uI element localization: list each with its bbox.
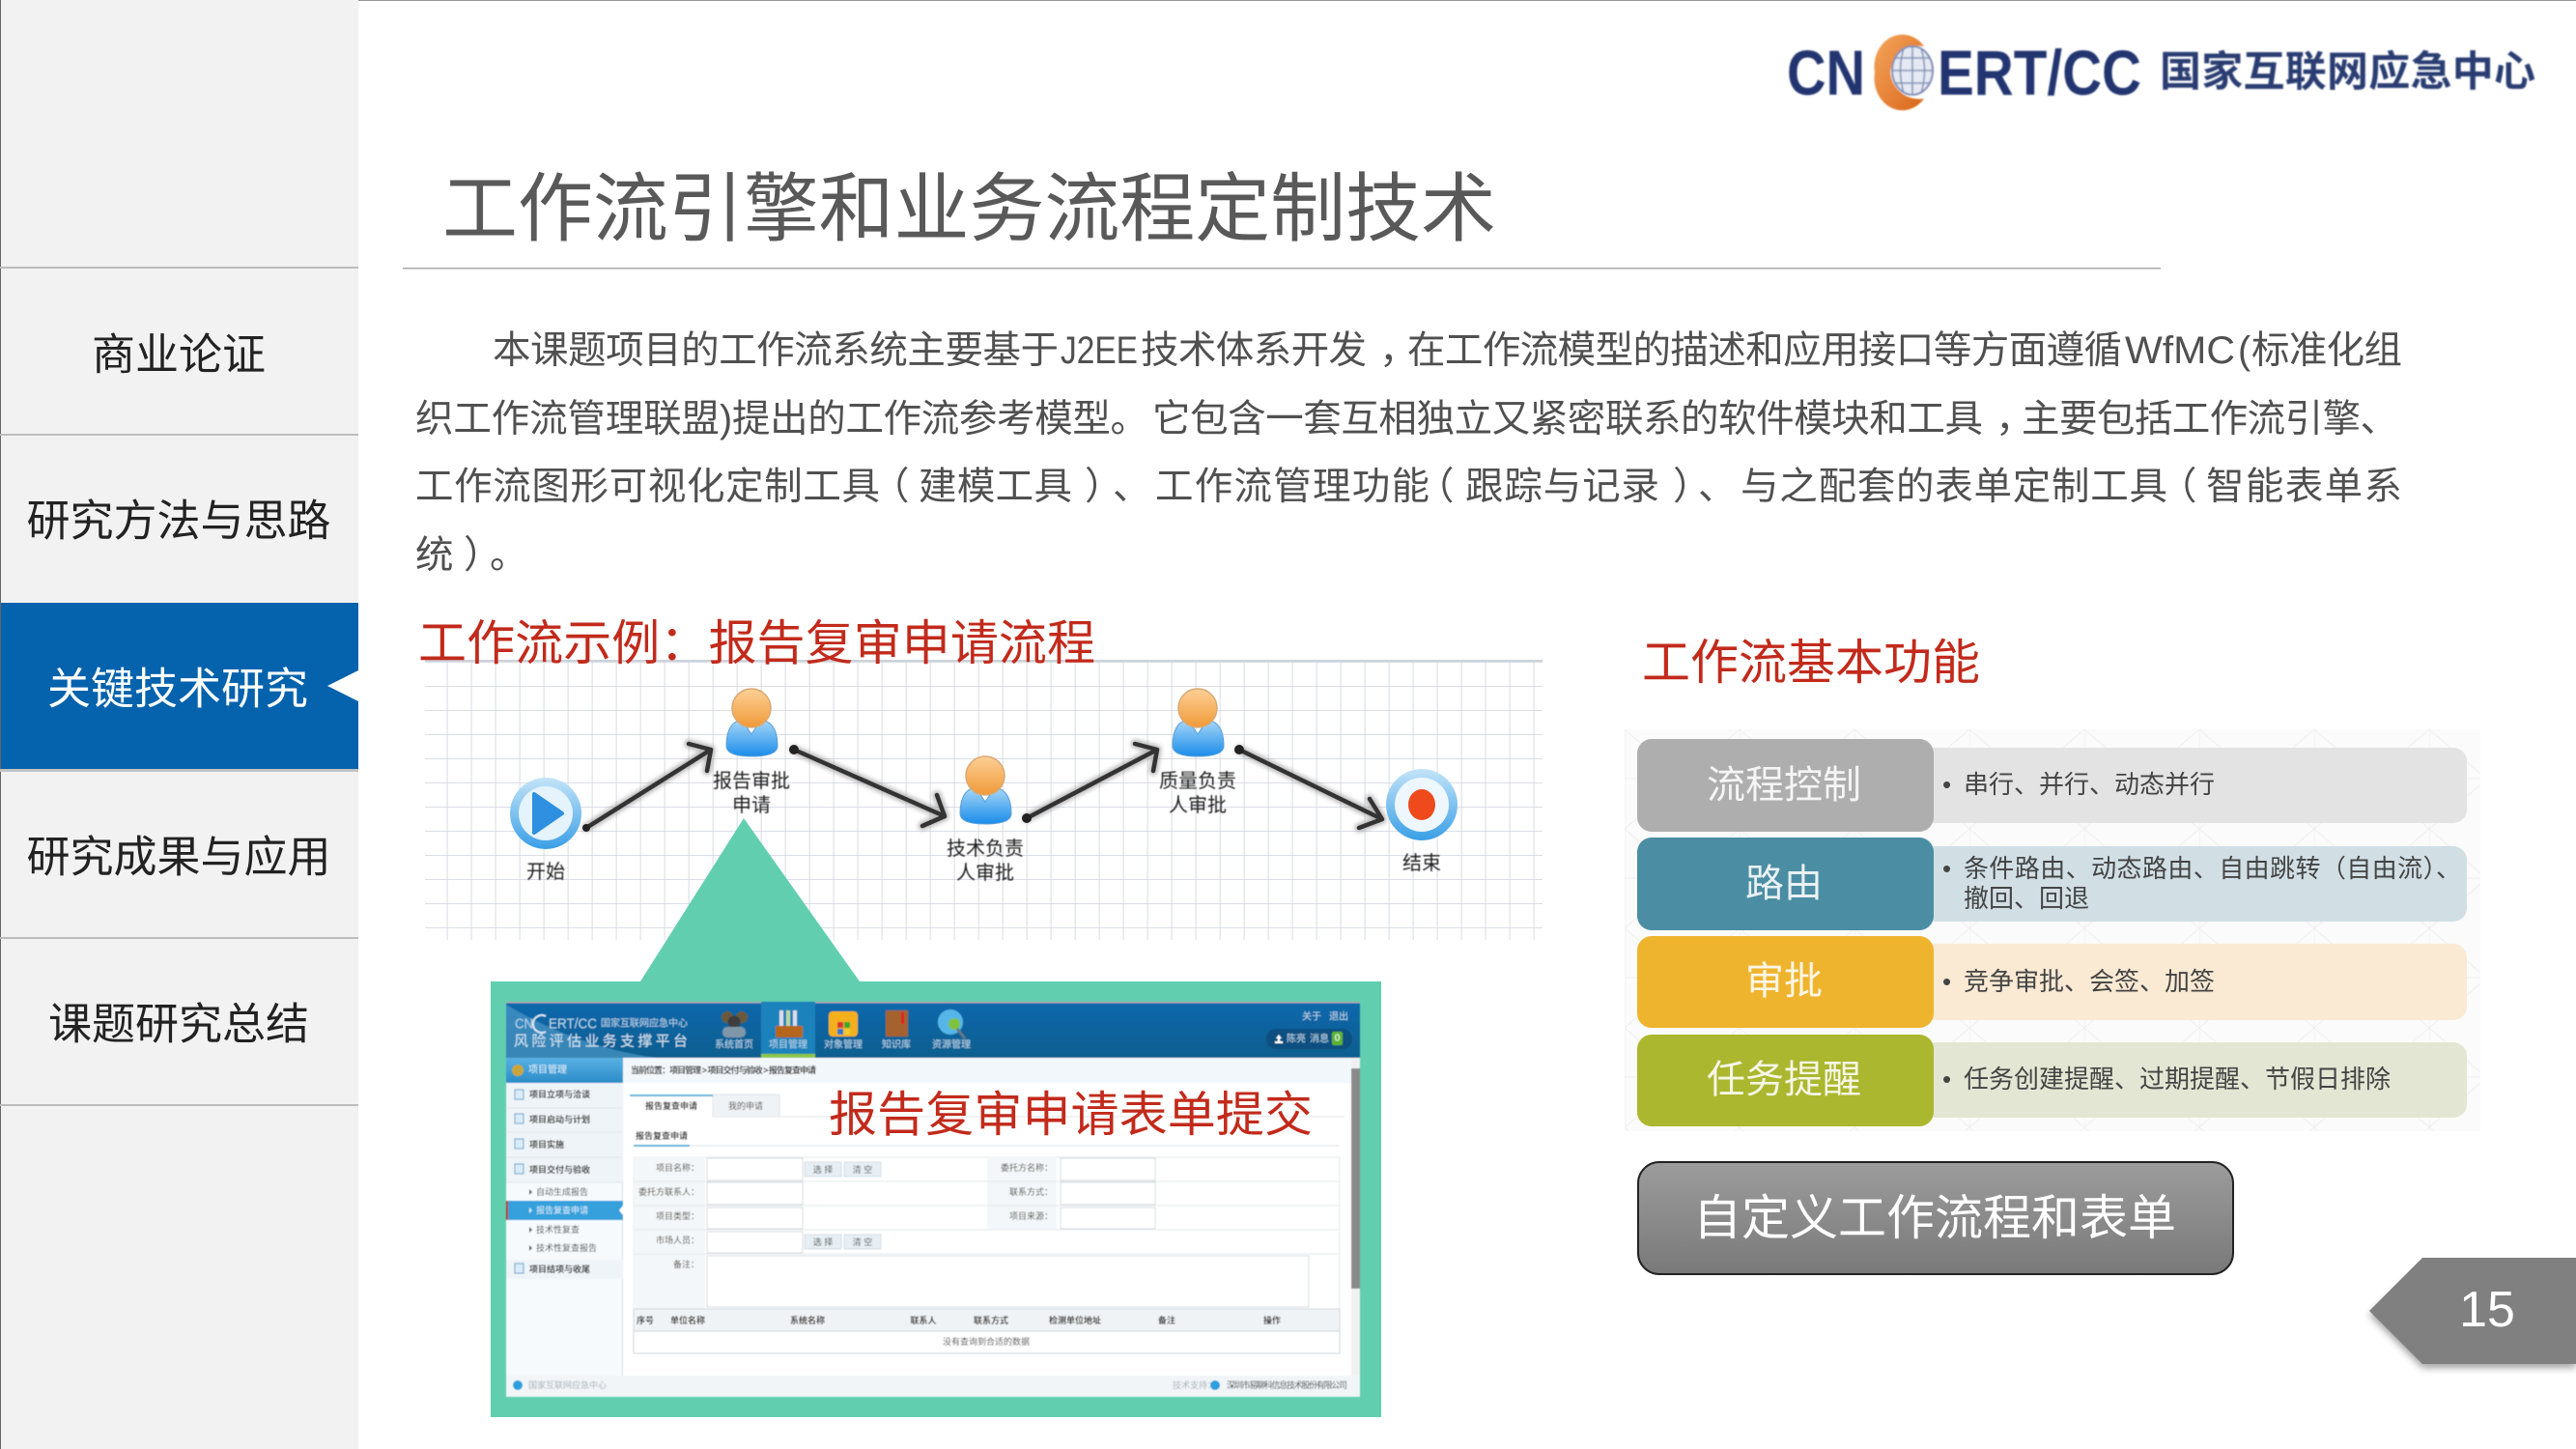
screenshot form: 清 空 — [853, 1164, 872, 1175]
nav item: business case: 商业论证 — [92, 330, 266, 379]
text block: introduction paragraph: 提出的工作流参考模型。 — [732, 398, 1148, 440]
heading: workflow example: 工作流示例：报告复审申请流程 — [418, 616, 1095, 670]
icon: start node — [510, 778, 581, 849]
icon: nav knowledge book — [886, 1010, 908, 1037]
text block: introduction paragraph: 、 — [1113, 466, 1151, 508]
label: quality lead approval: 人审批 — [1169, 794, 1227, 816]
icon: globe — [1874, 35, 1933, 110]
screenshot header bar: ERT/CC — [549, 1016, 597, 1032]
screenshot header bar: CN — [515, 1016, 533, 1032]
screenshot form: 市场人员： — [656, 1235, 699, 1245]
row: approval: • — [1942, 967, 1951, 996]
row: task reminder: 任务提醒 — [1707, 1059, 1861, 1101]
row: process control — [1637, 739, 2467, 832]
icon: nav object — [829, 1011, 858, 1037]
logo: CNCERT/CC: 国家互联网应急中心 — [2160, 49, 2535, 96]
nav item: key technology (active) — [1, 603, 358, 769]
text block: introduction paragraph: 与之配套的表单定制工具 — [1741, 466, 2167, 508]
callout: custom workflow button: 自定义工作流程和表单 — [1693, 1191, 2176, 1245]
text block: introduction paragraph: ， — [1379, 329, 1418, 372]
screenshot header bar: 风险评估业务支撑平台 — [514, 1034, 688, 1049]
screenshot form: 委托方联系人： — [638, 1186, 699, 1197]
text block: introduction paragraph: ） — [1673, 466, 1712, 508]
icon: person technical lead — [960, 756, 1011, 824]
callout: custom workflow button — [1638, 1162, 2233, 1274]
screenshot table: 检测单位地址 — [1049, 1315, 1101, 1325]
screenshot form: 项目类型： — [656, 1210, 699, 1221]
heading: basic workflow functions: 工作流基本功能 — [1642, 636, 1980, 690]
screenshot sidebar: 项目立项与洽谈 — [529, 1089, 590, 1099]
screenshot header bar: 系统首页 — [715, 1037, 753, 1051]
label: report approval request: 申请 — [732, 794, 771, 816]
text block: introduction paragraph: 本课题项目的工作流系统主要基于 — [493, 329, 1059, 372]
arrow: tech review to quality review — [1022, 744, 1157, 823]
screenshot table: 联系方式 — [974, 1315, 1008, 1325]
text block: introduction paragraph: WfMC — [2125, 329, 2235, 372]
screenshot sidebar: 技术性复查报告 — [536, 1242, 597, 1253]
screenshot sidebar: 自动生成报告 — [536, 1186, 588, 1197]
icon: end node — [1386, 769, 1458, 840]
text block: introduction paragraph: ） — [464, 534, 502, 577]
text block: introduction paragraph: 标准化组 — [2251, 329, 2402, 372]
page number tag — [2369, 1258, 2576, 1368]
panel: form screenshot — [506, 1002, 1360, 1397]
panel: workflow function list — [1625, 729, 2480, 1131]
screenshot tabs: 报告复查申请 — [645, 1100, 697, 1111]
text block: introduction paragraph: 统 — [415, 534, 454, 577]
row: process control: 串行、并行、动态并行 — [1964, 770, 2215, 799]
screenshot tabs — [630, 1094, 1345, 1147]
row: routing: 撤回、回退 — [1964, 884, 2089, 913]
label: end: 结束 — [1402, 852, 1441, 874]
screenshot scrollbar — [1351, 1058, 1360, 1376]
text block: introduction paragraph: 跟踪与记录 — [1465, 466, 1659, 508]
screenshot form: 备注： — [673, 1259, 699, 1269]
text block: introduction paragraph: 在工作流模型的描述和应用接口等方面遵循 — [1407, 329, 2122, 372]
arrow: quality review to end — [1234, 745, 1382, 828]
screenshot form: 项目来源： — [1009, 1211, 1053, 1221]
row: task reminder: 任务创建提醒、过期提醒、节假日排除 — [1964, 1065, 2391, 1094]
text block: introduction paragraph: J2EE — [1061, 329, 1138, 372]
screenshot header bar: 资源管理 — [932, 1037, 971, 1051]
nav item: summary: 课题研究总结 — [48, 999, 309, 1049]
label: report approval request: 报告审批 — [713, 770, 790, 792]
screenshot sidebar: 项目交付与验收 — [529, 1164, 590, 1175]
screenshot sidebar: 项目管理 — [528, 1063, 567, 1076]
row: process control: • — [1942, 770, 1951, 799]
label: quality lead approval — [1159, 770, 1236, 816]
row: task reminder — [1637, 1035, 2467, 1126]
screenshot table — [634, 1309, 1340, 1353]
screenshot form: 项目名称： — [656, 1162, 699, 1173]
screenshot table: 单位名称 — [670, 1315, 705, 1325]
screenshot header bar: 知识库 — [882, 1037, 911, 1051]
text block: introduction paragraph: 工作流图形可视化定制工具 — [415, 466, 880, 508]
text block: introduction paragraph: ( — [2238, 329, 2250, 372]
arrow: start to report — [582, 744, 711, 832]
nav item: results and application: 研究成果与应用 — [26, 833, 331, 881]
text block: introduction paragraph: 织工作流管理联盟 — [415, 398, 720, 440]
label: quality lead approval: 质量负责 — [1159, 770, 1236, 792]
arrow: report to tech review — [789, 745, 945, 826]
text block: introduction paragraph: ） — [1085, 466, 1122, 508]
screenshot header bar: 消息 — [1310, 1032, 1329, 1045]
screenshot tabs: 我的申请 — [728, 1100, 763, 1111]
screenshot form: 选 择 — [813, 1236, 833, 1247]
nav item: research method: 研究方法与思路 — [26, 497, 331, 545]
row: approval — [1637, 936, 2467, 1028]
label: technical lead approval: 人审批 — [956, 862, 1014, 884]
screenshot form: 委托方名称： — [1001, 1162, 1053, 1173]
panel: left navigation sidebar — [0, 0, 358, 1449]
row: routing: • — [1942, 854, 1951, 883]
text block: introduction paragraph: 。 — [490, 534, 527, 577]
screenshot table: 没有查询到合适的数据 — [943, 1336, 1030, 1347]
icon: person quality lead — [1173, 689, 1224, 756]
callout: green pointer and screenshot frame — [491, 818, 1381, 1417]
screenshot breadcrumb — [623, 1058, 1351, 1083]
logo: CNCERT/CC: CN — [1787, 37, 1865, 108]
icon: nav home people — [722, 1011, 748, 1037]
label: technical lead approval: 技术负责 — [947, 838, 1024, 860]
screenshot tabs: 报告复查申请 — [636, 1130, 688, 1141]
text block: introduction paragraph: ， — [1996, 398, 2034, 440]
screenshot sidebar: 项目结项与收尾 — [529, 1264, 590, 1274]
text block: introduction paragraph: （ — [2159, 466, 2196, 508]
text block: introduction paragraph: （ — [1416, 466, 1455, 508]
screenshot sidebar: 报告复查申请 — [536, 1205, 588, 1215]
icon: person report applicant — [726, 689, 778, 756]
screenshot header bar: 国家互联网应急中心 — [601, 1016, 688, 1030]
text block: introduction paragraph: 主要包括工作流引擎、 — [2022, 398, 2398, 440]
screenshot header bar: 对象管理 — [824, 1037, 863, 1051]
row: routing: 条件路由、动态路由、自由跳转（自由流）、 — [1964, 854, 2461, 883]
screenshot footer: 国家互联网应急中心 — [528, 1379, 607, 1390]
screenshot footer: 技术支持： — [1173, 1379, 1216, 1390]
label: form submission: 报告复审申请表单提交 — [829, 1088, 1313, 1142]
row: process control: 流程控制 — [1707, 764, 1861, 807]
screenshot form: 选 择 — [813, 1164, 833, 1175]
page number tag: 15 — [2459, 1282, 2515, 1338]
screenshot header bar: 陈亮 — [1287, 1032, 1306, 1045]
nav item: key technology (active): 关键技术研究 — [47, 665, 308, 713]
screenshot sidebar: 项目实施 — [529, 1139, 564, 1150]
label: start: 开始 — [526, 861, 565, 883]
screenshot table: 联系人 — [910, 1315, 937, 1325]
row: task reminder: • — [1942, 1065, 1951, 1094]
logo: CNCERT/CC — [1787, 35, 2535, 110]
row: approval: 审批 — [1745, 960, 1823, 1003]
screenshot footer: 深圳市易聊科信息技术股份有限公司 — [1227, 1379, 1347, 1390]
screenshot breadcrumb: 当前位置：项目管理 > 项目交付与验收 > 报告复查申请 — [631, 1065, 816, 1075]
icon: nav project — [776, 1010, 803, 1037]
text block: introduction paragraph: 工作流管理功能 — [1155, 466, 1430, 508]
screenshot table: 系统名称 — [790, 1315, 825, 1325]
text block: introduction paragraph: 智能表单系 — [2206, 466, 2402, 508]
row: routing: 路由 — [1745, 863, 1823, 905]
top edge line — [358, 0, 2576, 1]
screenshot header bar: 退出 — [1329, 1010, 1348, 1022]
panel: workflow diagram — [425, 660, 1543, 940]
screenshot form: 联系方式： — [1009, 1186, 1053, 1197]
screenshot table: 备注 — [1158, 1315, 1175, 1325]
text block: introduction paragraph: ) — [720, 398, 732, 440]
screenshot header bar — [506, 1002, 1360, 1058]
screenshot sidebar — [506, 1058, 623, 1376]
screenshot header bar: 关于 — [1302, 1010, 1321, 1022]
row: approval: 竞争审批、会签、加签 — [1964, 967, 2215, 996]
text block: introduction paragraph: 技术体系开发 — [1141, 329, 1367, 372]
label: report approval request — [713, 770, 790, 816]
screenshot sidebar: 项目启动与计划 — [529, 1114, 590, 1124]
screenshot table: 操作 — [1263, 1315, 1281, 1325]
text block: introduction paragraph — [415, 329, 2402, 577]
title: 工作流引擎和业务流程定制技术 — [442, 166, 1496, 251]
screenshot sidebar: 技术性复查 — [536, 1224, 580, 1235]
text block: introduction paragraph: 、 — [1698, 466, 1737, 508]
logo: CNCERT/CC: ERT/CC — [1938, 37, 2141, 108]
label: technical lead approval — [947, 838, 1024, 884]
screenshot form: 清 空 — [853, 1236, 872, 1247]
screenshot form — [634, 1157, 1340, 1309]
text block: introduction paragraph: 它包含一套互相独立又紧密联系的软件模块和工具 — [1152, 398, 1983, 440]
icon: nav resources globe — [938, 1009, 965, 1038]
text block: introduction paragraph: （ — [871, 466, 910, 508]
screenshot footer — [506, 1376, 1360, 1397]
screenshot header bar: 0 — [1335, 1034, 1341, 1043]
screenshot table: 序号 — [637, 1315, 654, 1325]
row: routing — [1637, 838, 2467, 930]
text block: introduction paragraph: 建模工具 — [919, 466, 1072, 508]
screenshot header bar: 项目管理 — [769, 1037, 807, 1051]
